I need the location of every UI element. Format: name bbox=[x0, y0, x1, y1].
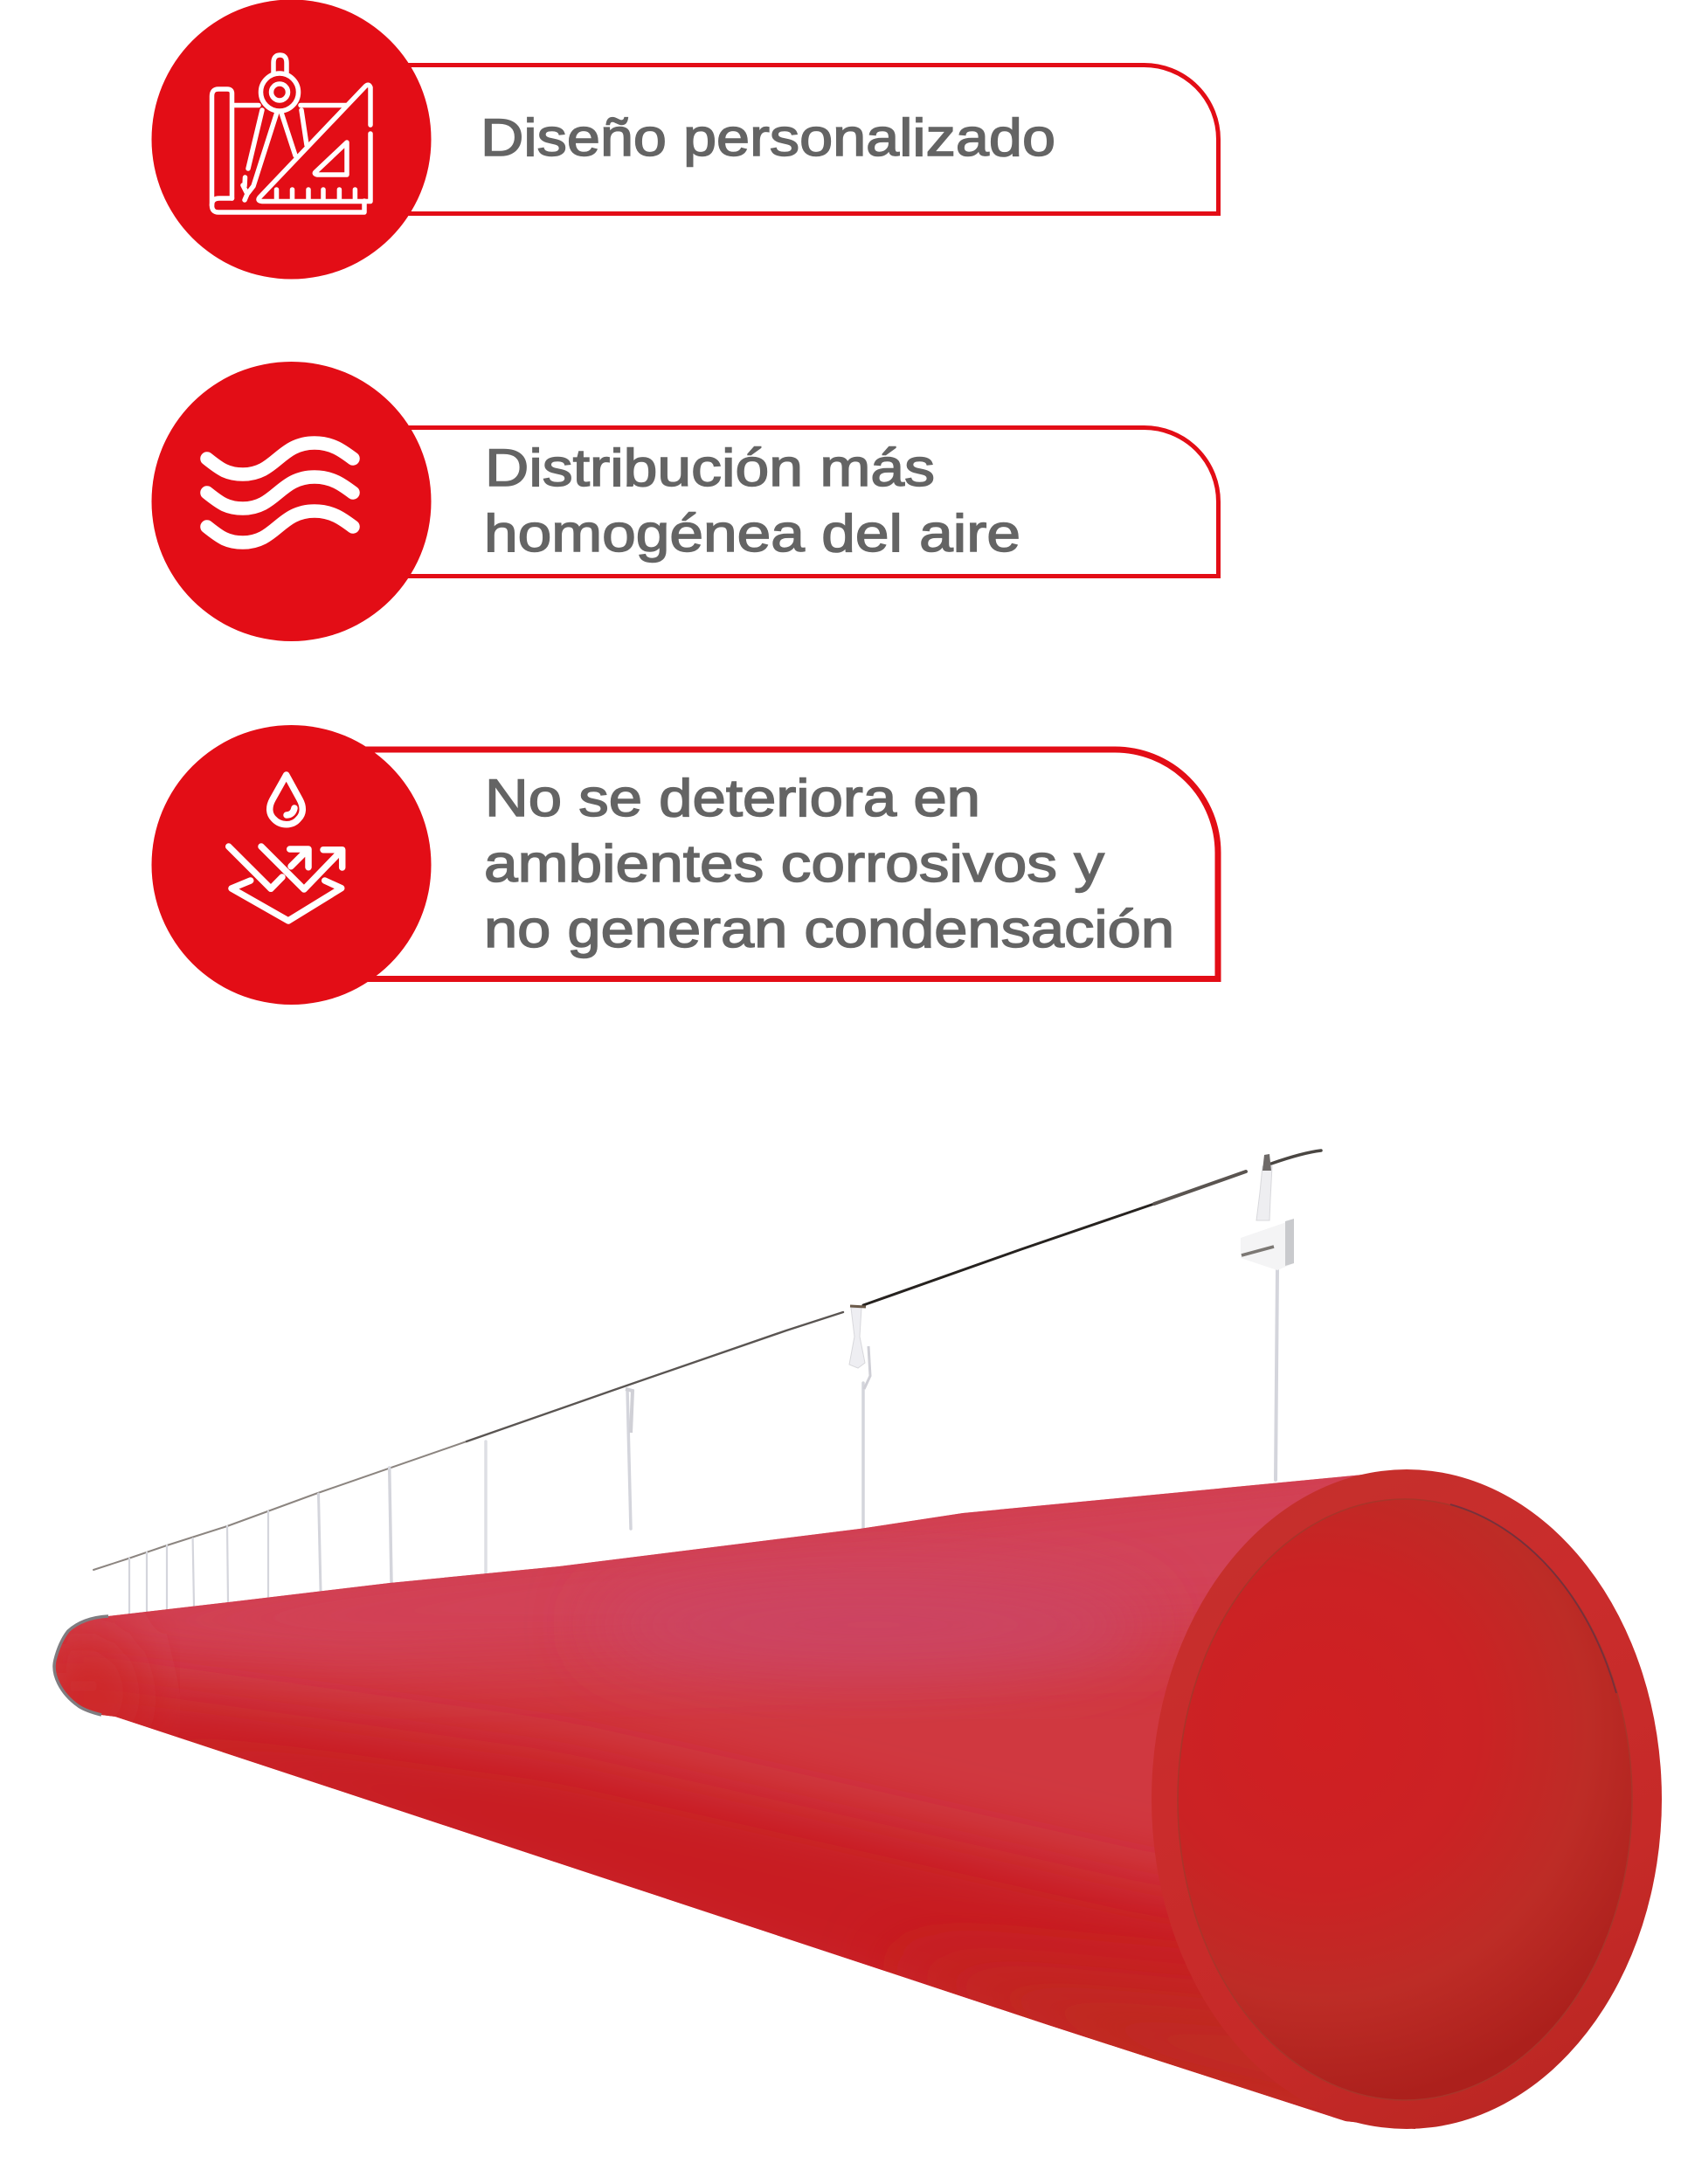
icon: three waves bbox=[207, 443, 353, 543]
duct near end disk bbox=[1178, 1499, 1632, 2100]
callout box: resistencia a corrosión bbox=[291, 750, 1218, 978]
hanger clip: near bbox=[626, 1306, 870, 1433]
icon circle: drafting tools bbox=[152, 0, 432, 280]
icon: drop and reflecting surface bbox=[229, 775, 342, 921]
icon circle: water repellent bbox=[152, 725, 432, 1005]
hanger clip: far bracket bbox=[1241, 1154, 1294, 1270]
text: diseño personalizado: Diseño personalizado bbox=[481, 108, 1055, 167]
text: distribución más homogénea del aire: homogénea del aire bbox=[484, 504, 1020, 563]
text: no se deteriora en ambientes corrosivos: no generan condensación bbox=[484, 900, 1174, 958]
text: distribución más homogénea del aire: Distribución más bbox=[485, 439, 935, 497]
duct far end rim bbox=[54, 1616, 108, 1715]
text: no se deteriora en ambientes corrosivos: No se deteriora en bbox=[485, 769, 980, 827]
feature row: distribución homogénea bbox=[152, 362, 1219, 641]
icon circle: air waves bbox=[152, 362, 432, 641]
hangers bbox=[129, 1269, 1277, 1614]
suspension wire bbox=[93, 1151, 1321, 1570]
duct illustration bbox=[35, 1151, 1662, 2158]
text: distribución más homogénea del aire bbox=[484, 439, 1020, 563]
feature row: resistencia a corrosión bbox=[152, 725, 1218, 1005]
text: no se deteriora en ambientes corrosivos: ambientes corrosivos y bbox=[484, 834, 1104, 893]
feature row: diseño personalizado bbox=[152, 0, 1219, 280]
duct near end ring bbox=[1152, 1469, 1662, 2129]
disk highlight line bbox=[1450, 1504, 1616, 1693]
callout box: diseño personalizado bbox=[291, 65, 1219, 213]
text: no se deteriora en ambientes corrosivos bbox=[484, 769, 1174, 958]
icon: compass and set square bbox=[211, 55, 370, 212]
duct body bbox=[56, 1475, 1415, 2129]
callout box: distribución homogénea bbox=[291, 427, 1219, 577]
